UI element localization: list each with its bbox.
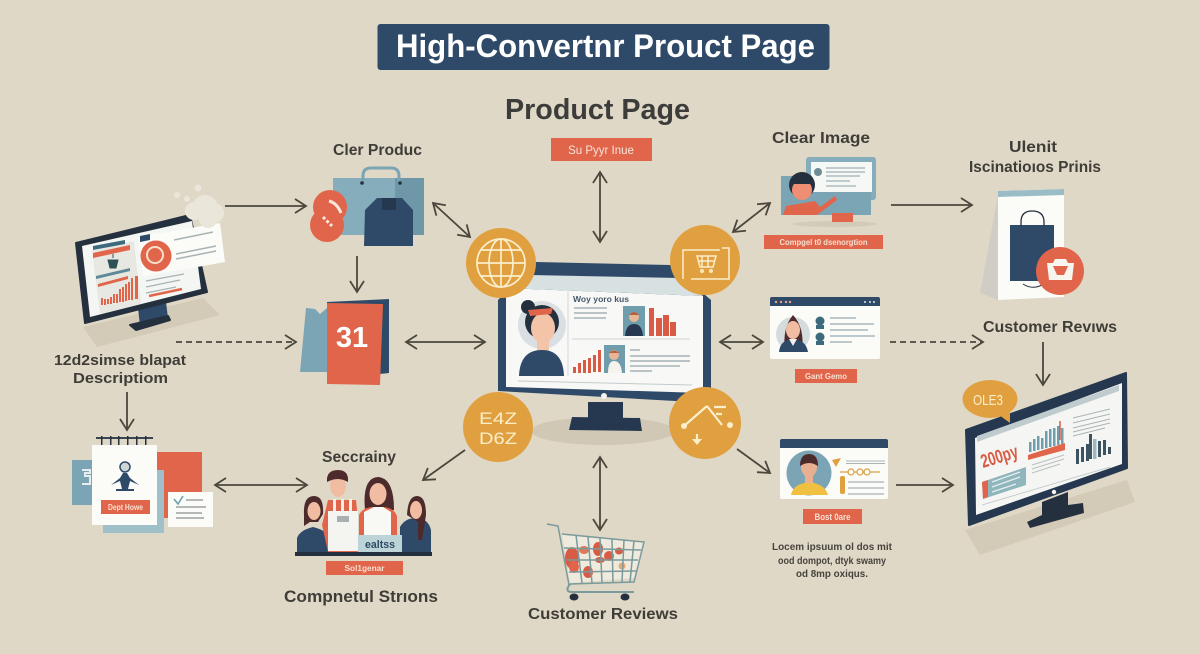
icon: letter badge bbox=[463, 392, 533, 462]
speech bubble bbox=[962, 380, 1018, 423]
icon: letter badge: D6Z bbox=[479, 429, 517, 448]
illustration: clear image presenter bbox=[781, 157, 877, 227]
text block: lorem: Locem ipsuum ol dos mit bbox=[772, 541, 892, 553]
label: customer reviews: Customer Reviews bbox=[528, 606, 678, 623]
label: seccrainy: Seccrainy bbox=[322, 449, 396, 466]
label: upper right: Iscinatioıos Prinis bbox=[969, 159, 1101, 176]
label: clear image: Clear Image bbox=[772, 130, 870, 147]
text block: lorem bbox=[772, 541, 892, 580]
badge: team caption bbox=[326, 561, 403, 575]
icon: cloud bbox=[174, 184, 224, 228]
badge: profile caption bbox=[795, 369, 857, 383]
illustration: team bbox=[295, 470, 432, 556]
illustration: team: ealtss bbox=[365, 539, 395, 551]
label: description: Descriptiom bbox=[73, 370, 168, 387]
icon: shopping cart bbox=[547, 524, 644, 600]
bar chart bottom bbox=[573, 350, 601, 373]
icon: cart badge bbox=[670, 225, 740, 295]
badge: clear image caption bbox=[764, 235, 883, 249]
bar chart top bbox=[649, 308, 676, 336]
label: description bbox=[54, 352, 186, 387]
icon: notebook stack bbox=[72, 436, 213, 533]
badge: top centre bbox=[551, 138, 652, 161]
card: profile bbox=[770, 297, 880, 359]
badge: team caption: Sol1genar bbox=[344, 563, 385, 573]
label: upper right: Ulenit bbox=[1009, 139, 1058, 156]
icon: calendar 31: 31 bbox=[336, 322, 368, 354]
icon: globe badge bbox=[466, 228, 536, 298]
big dashboard monitor bbox=[962, 373, 1135, 555]
badge: clear image caption: Compgel t0 dsenorgtion bbox=[780, 237, 868, 247]
label: clear product: Cler Produc bbox=[333, 142, 422, 159]
photo man bbox=[623, 306, 645, 336]
label: customer reviews right: Customer Revıws bbox=[983, 319, 1117, 336]
badge: avatar caption bbox=[803, 509, 862, 524]
badge: profile caption: Gant Gemo bbox=[805, 371, 847, 381]
label: compnetul: Compnetul Strıons bbox=[284, 588, 438, 606]
bar chart teal bbox=[1029, 426, 1064, 452]
heading: product page: Product Page bbox=[505, 94, 690, 126]
left monitor illustration bbox=[76, 184, 225, 347]
icon: network badge bbox=[669, 387, 741, 459]
stat: 200py: 200py bbox=[978, 441, 1021, 473]
icon: letter badge: E4Z bbox=[479, 409, 517, 428]
icon: bag card bbox=[980, 189, 1084, 300]
icon: notebook stack: Dept Howe bbox=[108, 502, 143, 512]
title: High-Convertnr Prouct Page bbox=[396, 28, 815, 64]
card: avatar bbox=[780, 439, 888, 499]
photo woman bbox=[604, 345, 625, 373]
speech bubble: OLE3 bbox=[973, 392, 1003, 409]
badge: top centre: Su Pyyr Inue bbox=[568, 145, 634, 157]
icon: calendar 31 bbox=[300, 299, 389, 385]
person portrait bbox=[518, 300, 566, 376]
label: description: 12d2simse blapat bbox=[54, 352, 186, 369]
bar chart dark bbox=[1076, 434, 1111, 464]
main monitor bbox=[498, 262, 711, 445]
text block: lorem: ood dompot, dtyk swamy bbox=[778, 555, 886, 567]
label: upper right bbox=[969, 139, 1101, 176]
screen heading: Woy yoro kus bbox=[573, 295, 630, 304]
badge: avatar caption: Bost 0are bbox=[814, 512, 850, 522]
text block: lorem: od 8mp oxiqus. bbox=[796, 568, 868, 580]
icon: shopping bag with tags bbox=[310, 168, 424, 246]
arrows bbox=[127, 172, 1043, 530]
